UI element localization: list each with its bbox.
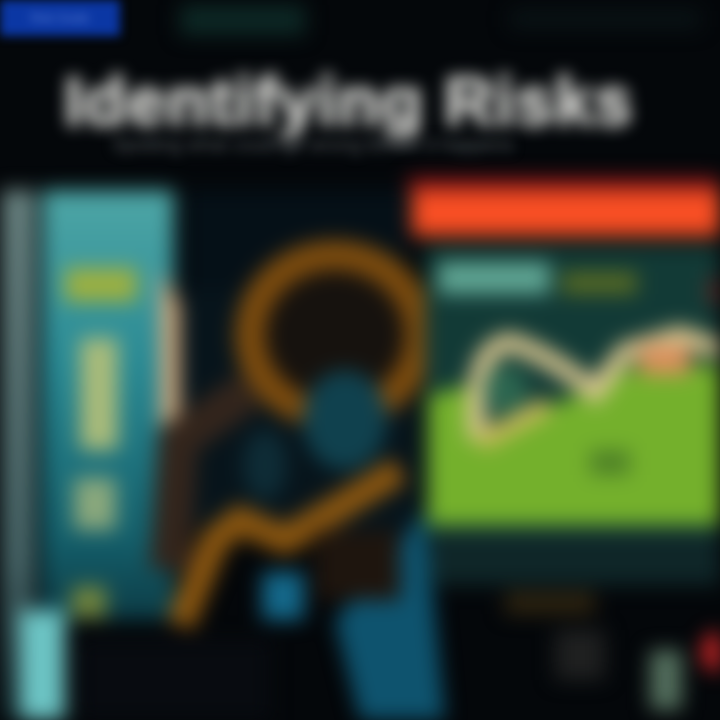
- subtitle: Spotting what could go wrong before it happens: [112, 135, 513, 156]
- badge: Risk Guide: [31, 11, 89, 25]
- banner: orange bar: [412, 190, 720, 236]
- chart: green area chart: [425, 245, 720, 535]
- panel: lower right dark section: [430, 535, 720, 710]
- title: Identifying Risks: [64, 63, 633, 140]
- badge: [0, 0, 120, 36]
- panel: left data column: [2, 190, 218, 720]
- icon: magnifying glass: [80, 190, 445, 720]
